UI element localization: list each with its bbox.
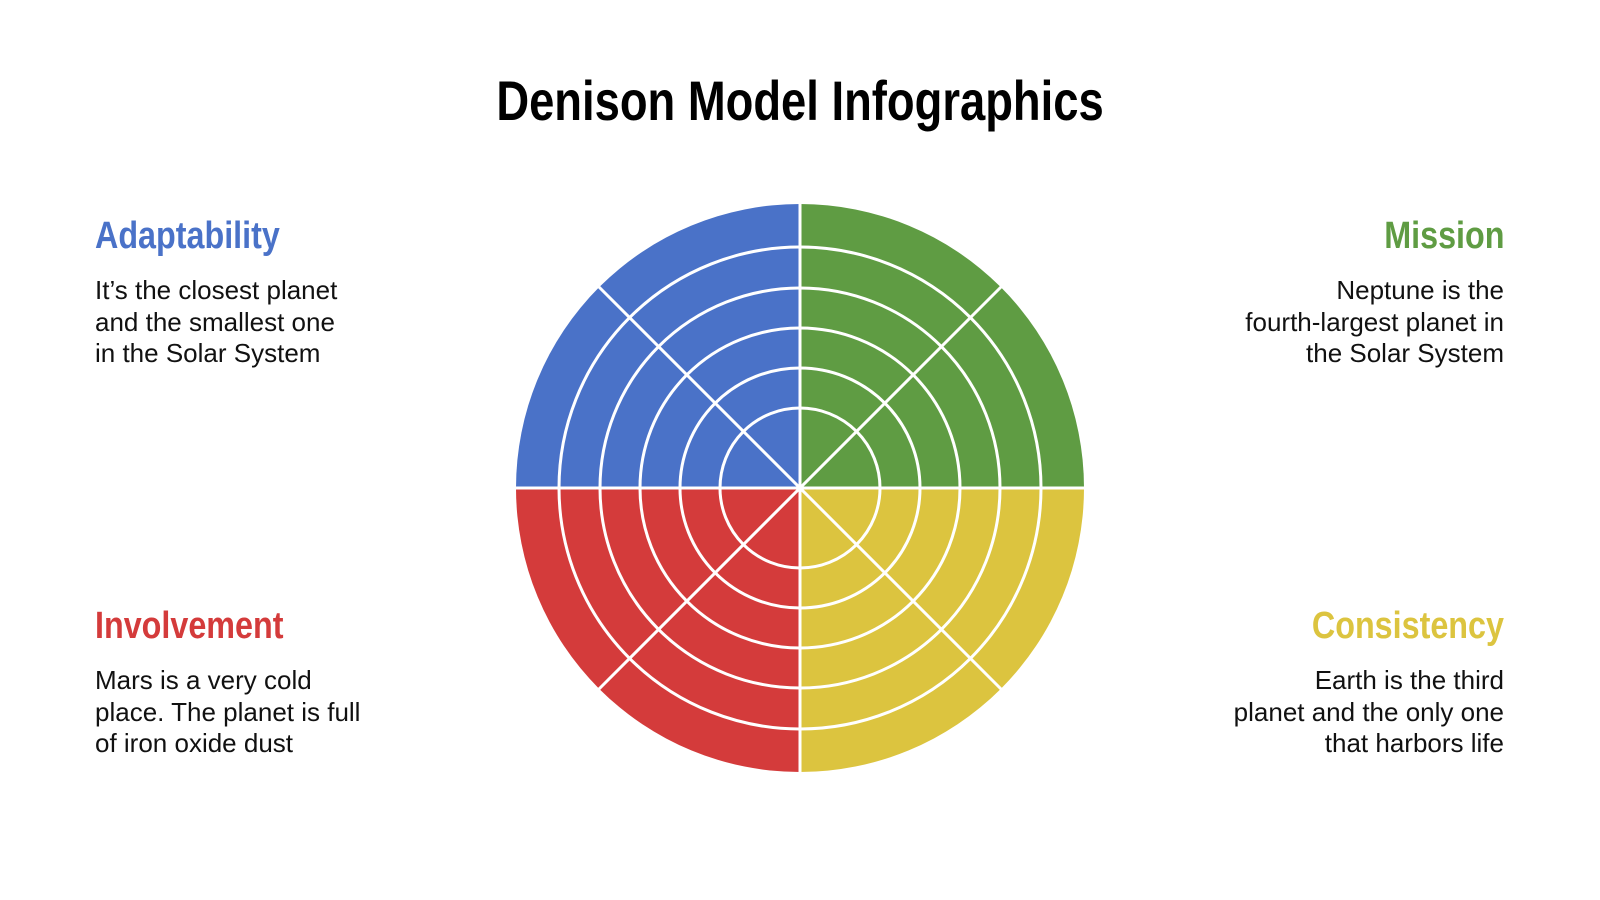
- text: Mission: the Solar System: [1306, 338, 1504, 368]
- heading: Mission: Mission: [1384, 215, 1504, 257]
- text: Consistency: [1234, 665, 1504, 758]
- text: Adaptability: in the Solar System: [95, 338, 320, 368]
- text: Adaptability: [95, 275, 338, 368]
- text: Mission: [1245, 275, 1504, 368]
- text: Involvement: [95, 665, 360, 758]
- text: Involvement: Mars is a very cold: [95, 665, 312, 695]
- quadrant: yellow: [800, 488, 1084, 772]
- text: Mission: Neptune is the: [1336, 275, 1504, 305]
- quadrant: green: [800, 204, 1084, 488]
- heading: Adaptability: Adaptability: [95, 215, 280, 257]
- text: Adaptability: and the smallest one: [95, 307, 335, 337]
- text: Consistency: planet and the only one: [1234, 697, 1504, 727]
- heading: Involvement: Involvement: [95, 605, 283, 647]
- text: Consistency: Earth is the third: [1315, 665, 1504, 695]
- text: Adaptability: It’s the closest planet: [95, 275, 337, 305]
- quadrant: blue: [516, 204, 800, 488]
- text: Involvement: place. The planet is full: [95, 697, 360, 727]
- text: Involvement: of iron oxide dust: [95, 728, 293, 758]
- quadrant: red: [516, 488, 800, 772]
- text: Mission: fourth-largest planet in: [1245, 307, 1504, 337]
- title: Denison Model Infographics: [496, 69, 1104, 132]
- ring lines: [512, 200, 1088, 776]
- text: Consistency: that harbors life: [1325, 728, 1504, 758]
- heading: Consistency: Consistency: [1312, 605, 1504, 647]
